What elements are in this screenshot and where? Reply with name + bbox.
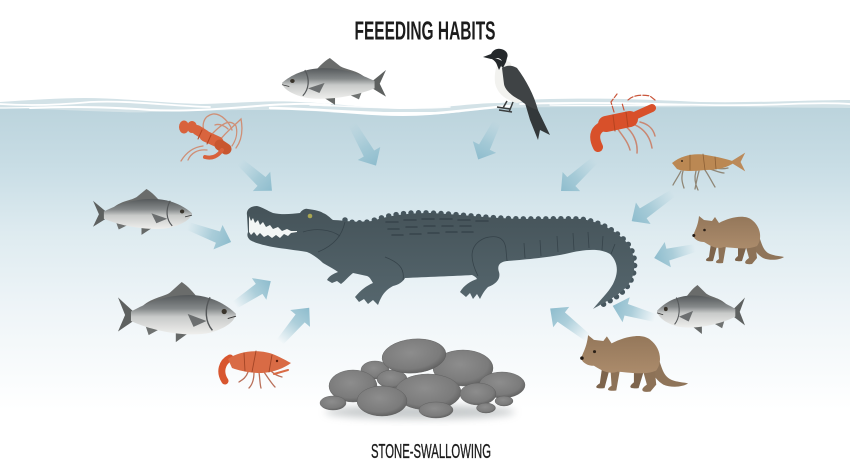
crocodile back ridges — [386, 219, 488, 235]
crocodile eye — [308, 214, 312, 218]
arrow: bird to crocodile — [467, 116, 509, 165]
arrow: left upper fish to crocodile — [183, 214, 236, 254]
arrow: top-left crayfish to crocodile — [231, 152, 281, 200]
icon: brown shrimp — [672, 154, 744, 190]
icon: bird — [483, 49, 550, 140]
arrow: lower mammal to crocodile — [542, 298, 596, 348]
icon: top-left crayfish — [179, 114, 242, 161]
icon: bottom shrimp — [222, 351, 291, 388]
icon: upper mammal — [692, 216, 784, 264]
crocodile open mouth — [249, 216, 297, 238]
water surface ripples — [0, 102, 850, 114]
arrow: brown shrimp to crocodile — [624, 182, 680, 232]
title: FEEEDING HABITS — [354, 16, 496, 46]
crocodile body lines — [303, 222, 615, 280]
arrow: right fish to crocodile — [609, 293, 659, 330]
water background — [0, 107, 850, 464]
rocks shadow — [325, 405, 515, 419]
crocodile body — [247, 206, 634, 309]
arrow: top fish to crocodile — [341, 118, 387, 172]
stone-swallowing label: STONE-SWALLOWING — [371, 441, 491, 463]
arrow: top-right lobster to crocodile — [552, 150, 604, 201]
icon: left lower fish — [118, 282, 236, 342]
icon: right fish — [657, 285, 745, 334]
arrow: left lower fish to crocodile — [228, 270, 278, 316]
crocodile back scutes — [345, 213, 635, 307]
icon: top-right lobster — [595, 94, 655, 153]
water surface band — [0, 98, 850, 112]
crocodile — [247, 206, 635, 309]
icon: left upper fish — [93, 189, 192, 235]
stone pile — [320, 336, 525, 418]
arrow: bottom shrimp to crocodile — [270, 299, 319, 350]
icon: lower mammal — [580, 335, 688, 392]
icon: top fish — [282, 58, 386, 105]
arrow: upper mammal to crocodile — [651, 235, 698, 271]
